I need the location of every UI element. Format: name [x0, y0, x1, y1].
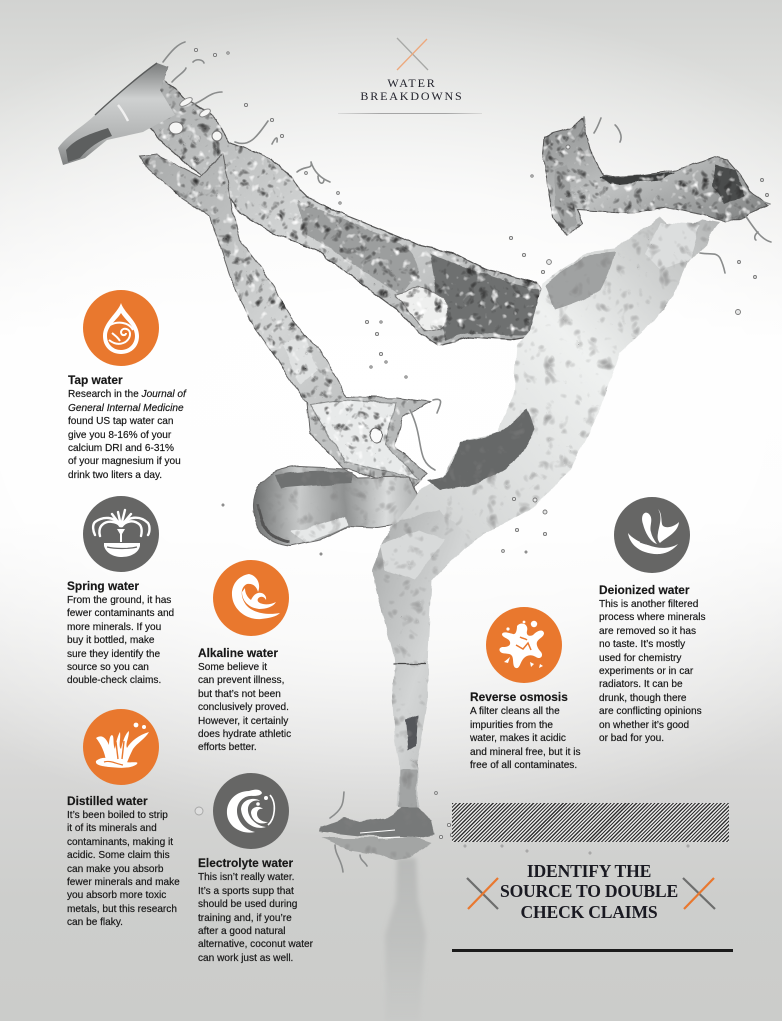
text block: metals, but this research	[67, 904, 177, 915]
text block: It’s been boiled to strip	[67, 810, 168, 821]
text block: on whether it’s good	[599, 720, 689, 731]
text block: water, makes it acidic	[470, 733, 566, 744]
foot smooth surface	[58, 63, 222, 165]
raised arm and hand	[140, 155, 430, 490]
reflection under hand	[385, 858, 426, 1021]
text block: can work just as well.	[198, 953, 293, 964]
text block: However, it certainly	[198, 716, 288, 726]
text block	[67, 595, 174, 686]
text block: it of its minerals and	[67, 823, 157, 834]
text block: used for chemistry	[599, 652, 681, 664]
text block: can make you absorb	[67, 864, 164, 874]
icon: splat	[486, 607, 562, 683]
panel: reverse osmosis	[470, 607, 581, 771]
icon: splash	[83, 709, 159, 785]
raised leg and foot	[140, 67, 545, 345]
text block: drunk, though there	[599, 693, 687, 704]
callout heading	[500, 860, 678, 922]
text block: process where minerals	[599, 612, 706, 623]
panel: distilled water	[66, 709, 180, 928]
text block: Research in the Journal of	[68, 389, 186, 400]
text block: of your magnesium if you	[68, 456, 181, 467]
text block: should be used during	[198, 899, 297, 910]
text block	[68, 389, 187, 481]
panel: electrolyte water	[198, 773, 313, 964]
panel: spring water	[67, 496, 174, 686]
text block: contaminants, making it	[67, 837, 173, 848]
water strands	[163, 42, 771, 872]
title rule	[338, 113, 482, 114]
icon: water drop	[83, 290, 159, 366]
text block	[66, 810, 180, 928]
callout heading: CHECK CLAIMS	[521, 902, 657, 922]
text block: more minerals. If you	[67, 622, 161, 633]
text block: conclusively proved.	[198, 702, 289, 713]
text block: calcium DRI and 6-31%	[68, 443, 174, 454]
text block: found US tap water can	[68, 416, 174, 427]
callout heading: SOURCE TO DOUBLE	[500, 881, 678, 901]
text block: A filter cleans all the	[470, 706, 560, 717]
heading: Tap water	[68, 373, 123, 387]
supporting arm	[372, 510, 473, 810]
text block: experiments or in car	[599, 666, 693, 677]
text block: does hydrate athletic	[198, 729, 291, 740]
text block: radiators. It can be	[599, 679, 683, 690]
text block: alternative, coconut water	[198, 939, 313, 950]
icon: wave	[213, 560, 289, 636]
text block	[599, 599, 706, 744]
text block: can prevent illness,	[198, 675, 284, 686]
text block: This isn’t really water.	[198, 872, 294, 883]
text block: sure they identify the	[67, 648, 160, 660]
heading: Deionized water	[599, 582, 690, 596]
text block: From the ground, it has	[67, 595, 171, 606]
text block: fewer minerals and make	[67, 877, 180, 888]
text block	[198, 662, 291, 753]
ground splash	[320, 808, 435, 860]
text block: are conflicting opinions	[599, 706, 702, 717]
title: BREAKDOWNS	[360, 89, 464, 103]
text block: This is another filtered	[599, 599, 698, 610]
text block: buy it bottled, make	[67, 635, 155, 646]
text block: but that’s not been	[198, 689, 281, 700]
heading: Reverse osmosis	[470, 690, 568, 704]
text block: and mineral free, but it is	[470, 747, 581, 758]
heading: Distilled water	[67, 794, 148, 808]
text block: General Internal Medicine	[68, 403, 184, 414]
panel: deionized water	[599, 497, 706, 744]
text block: acidic. Some claim this	[67, 850, 170, 861]
right cross mark right	[683, 878, 715, 909]
callout heading: IDENTIFY THE	[527, 860, 651, 880]
callout rule	[452, 949, 733, 952]
water droplets	[194, 48, 768, 854]
text block: source so you can	[67, 662, 149, 673]
hatched banner	[452, 803, 729, 842]
bent leg and foot	[543, 118, 767, 235]
panel: alkaline water	[198, 560, 291, 753]
text block: drink two liters a day.	[68, 470, 162, 481]
heading: Electrolyte water	[198, 856, 293, 870]
text block: fewer contaminants and	[67, 608, 174, 619]
text block: are removed so it has	[599, 626, 696, 637]
icon: droplet swirl	[614, 497, 690, 573]
icon: swirl wave	[213, 773, 289, 849]
text block: can be flaky.	[67, 917, 123, 928]
title: WATER	[387, 76, 437, 90]
text block	[198, 872, 313, 964]
text block: or bad for you.	[599, 733, 664, 744]
text block: It’s a sports supp that	[198, 886, 294, 897]
torso and thigh	[390, 217, 720, 570]
top cross mark	[397, 38, 428, 70]
text block: free of all contaminates.	[470, 760, 577, 771]
hand surface highlights	[360, 830, 400, 838]
text block: you absorb more toxic	[67, 890, 166, 901]
text block	[470, 706, 581, 771]
text block: no taste. It’s mostly	[599, 639, 685, 650]
text block: impurities from the	[470, 720, 553, 731]
heading: Spring water	[67, 578, 139, 592]
text block: efforts better.	[198, 742, 257, 753]
text block: after a good natural	[198, 926, 286, 937]
icon: fountain	[83, 496, 159, 572]
text block: Some believe it	[198, 662, 267, 673]
heading: Alkaline water	[198, 646, 278, 660]
text block: give you 8-16% of your	[68, 430, 171, 441]
right cross mark left	[467, 878, 498, 909]
head	[253, 466, 420, 546]
text block: double-check claims.	[67, 675, 161, 686]
panel: tap water	[68, 290, 187, 481]
text block: training and, if you’re	[198, 913, 292, 924]
title	[360, 76, 464, 103]
